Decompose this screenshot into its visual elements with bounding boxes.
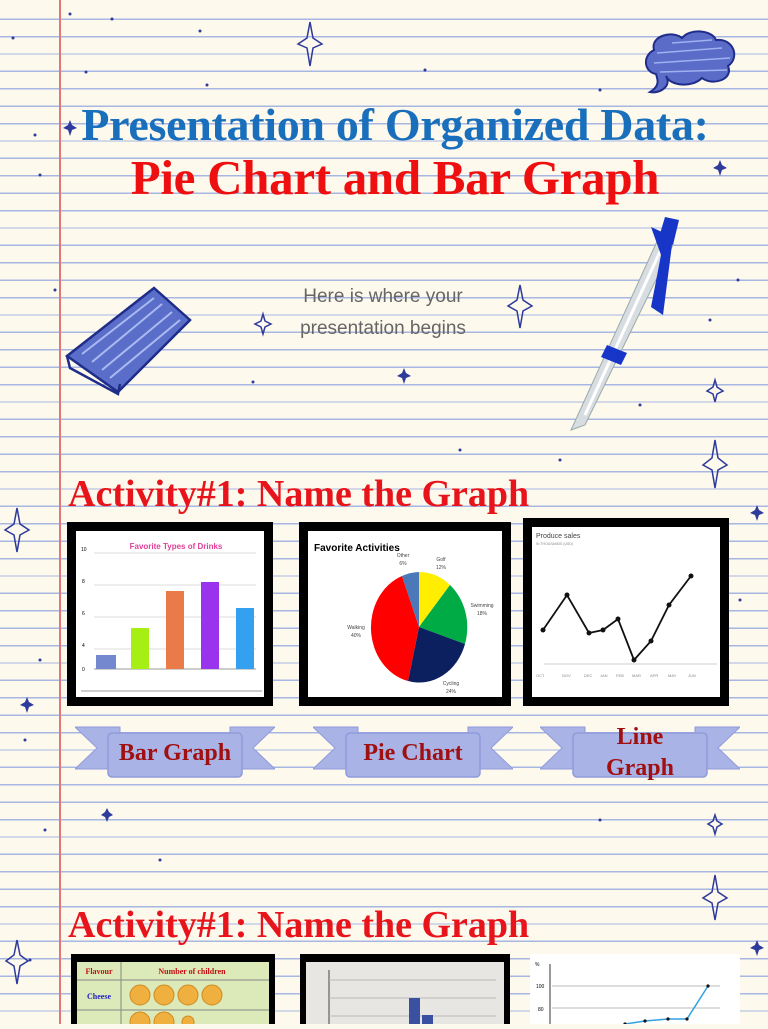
panel: pie chart image: 6% bbox=[399, 561, 407, 567]
panel: line graph image bbox=[523, 518, 729, 706]
panel: pie chart image: Golf bbox=[436, 557, 446, 563]
panel: bar graph image: Favorite Types of Drinks bbox=[130, 542, 223, 551]
panel: line graph image: NOV bbox=[562, 673, 571, 678]
ribbon: Line Graph: Graph bbox=[606, 755, 674, 781]
panel: pie chart image: Other bbox=[397, 553, 410, 559]
panel: line graph 2: % bbox=[535, 962, 540, 968]
ribbon: Bar Graph: Bar Graph bbox=[119, 740, 231, 766]
panel: bar graph image: 8 bbox=[82, 579, 85, 585]
icon: notebook bbox=[65, 286, 192, 396]
panel: pie chart image: Swimming bbox=[470, 603, 494, 609]
title bbox=[81, 99, 709, 205]
panel: pictograph table: Number of children bbox=[158, 967, 226, 976]
heading: activity 1 repeated: Activity#1: Name the Graph bbox=[68, 904, 529, 946]
panel: line graph image: JUN bbox=[688, 673, 696, 678]
title: Pie Chart and Bar Graph bbox=[131, 150, 659, 205]
panel: line graph image: IN THOUSANDS (USD) bbox=[536, 542, 573, 546]
panel: bar graph image: 0 bbox=[82, 667, 85, 673]
panel: pie chart image: Cycling bbox=[443, 681, 459, 687]
panel: pictograph table: Cheese bbox=[87, 992, 111, 1001]
panel: pie chart image: 24% bbox=[446, 689, 457, 695]
ribbon: Bar Graph bbox=[75, 726, 275, 778]
panel: line graph image: FEB bbox=[616, 673, 624, 678]
ribbon: Pie Chart bbox=[313, 726, 513, 778]
panel: line graph 2: 100 bbox=[536, 984, 545, 990]
icon: pen bbox=[570, 217, 679, 431]
panel: pictograph table: Flavour bbox=[85, 967, 113, 976]
title: Presentation of Organized Data: bbox=[81, 99, 709, 150]
panel: line graph 2 bbox=[530, 954, 740, 1024]
panel: line graph image: APR bbox=[650, 673, 658, 678]
subtitle: Here is where your presentation begins bbox=[300, 286, 466, 339]
panel: bar graph image: 6 bbox=[82, 611, 85, 617]
ribbon: Pie Chart: Pie Chart bbox=[363, 740, 463, 766]
panel: pie chart image: 18% bbox=[477, 611, 488, 617]
panel: pictograph table bbox=[71, 954, 275, 1024]
panel: line graph image: MAR bbox=[632, 673, 641, 678]
panel: line graph image: DEC bbox=[584, 673, 593, 678]
panel: bar graph image: 10 bbox=[81, 547, 87, 553]
panel: bar graph image: 4 bbox=[82, 643, 85, 649]
panel: line graph image: JAN bbox=[600, 673, 608, 678]
panel: pie chart image bbox=[299, 522, 511, 706]
ribbon: Line Graph bbox=[540, 724, 740, 781]
panel: bar graph 2 bbox=[300, 954, 510, 1024]
panel: line graph image: MAY bbox=[668, 673, 677, 678]
icon: scribble speech cloud bbox=[644, 30, 736, 94]
panel: line graph 2: 80 bbox=[538, 1007, 544, 1013]
panel: line graph image: Produce sales bbox=[536, 533, 581, 540]
panel: line graph image: OCT bbox=[536, 673, 545, 678]
panel: pie chart image: 12% bbox=[436, 565, 447, 571]
panel: pie chart image: 40% bbox=[351, 633, 362, 639]
heading: activity 1: Activity#1: Name the Graph bbox=[68, 473, 529, 515]
panel: pie chart image: Favorite Activities bbox=[314, 543, 400, 554]
panel: bar graph image bbox=[67, 522, 273, 706]
ribbon: Line Graph: Line bbox=[617, 724, 663, 750]
panel: pie chart image: Walking bbox=[347, 625, 365, 631]
